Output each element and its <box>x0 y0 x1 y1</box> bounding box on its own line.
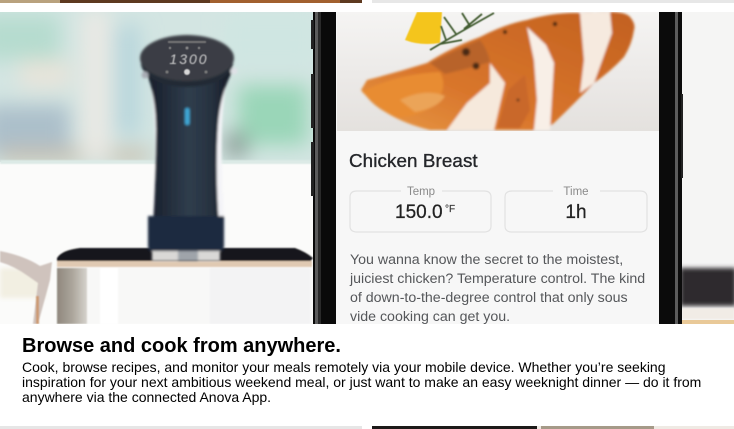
pot <box>0 248 313 324</box>
recipe description: juiciest chicken? Temperature control. The kind <box>349 271 645 287</box>
recipe title: Chicken Breast <box>349 150 478 171</box>
temp box: °F <box>445 204 455 215</box>
cooker controls <box>165 41 208 75</box>
recipe description: vide cooking can get you. <box>350 309 510 325</box>
herbs <box>430 13 494 50</box>
body text: anywhere via the connected Anova App. <box>22 389 271 405</box>
heading: Browse and cook from anywhere. <box>22 335 341 357</box>
top image strip left <box>0 0 362 3</box>
bottom image strip left <box>0 426 362 429</box>
phone left bezel <box>311 12 336 324</box>
food photo <box>337 12 659 131</box>
recipe description: You wanna know the secret to the moistest, <box>350 252 623 268</box>
chicken breast <box>361 12 634 130</box>
top image strip right <box>372 0 734 3</box>
phone <box>311 12 683 325</box>
recipe description: of down-to-the-degree control that only sous <box>350 290 628 306</box>
bottom image strip right <box>372 426 734 429</box>
photo background: blurred kitchen left <box>0 10 316 324</box>
temp box: 150.0 <box>395 202 443 223</box>
lemon wedge <box>405 12 442 44</box>
temp box <box>350 186 491 232</box>
time box: Time <box>563 186 589 198</box>
app screen <box>336 12 659 324</box>
temp box: Temp <box>407 186 435 198</box>
recipe description <box>349 252 645 325</box>
time box <box>505 186 647 232</box>
body text: inspiration for your next ambitious weekend meal, or just want to make an easy weeknight dinner — do it from <box>22 374 701 390</box>
time box: 1h <box>565 202 587 223</box>
phone right bezel <box>659 12 683 324</box>
photo background: blurred kitchen right <box>680 12 734 324</box>
body text <box>22 359 701 405</box>
sous vide cooker <box>140 35 238 261</box>
body text: Cook, browse recipes, and monitor your meals remotely via your mobile device. Whether you’re seeking <box>22 359 666 375</box>
cooker display: 1300 <box>169 51 209 67</box>
